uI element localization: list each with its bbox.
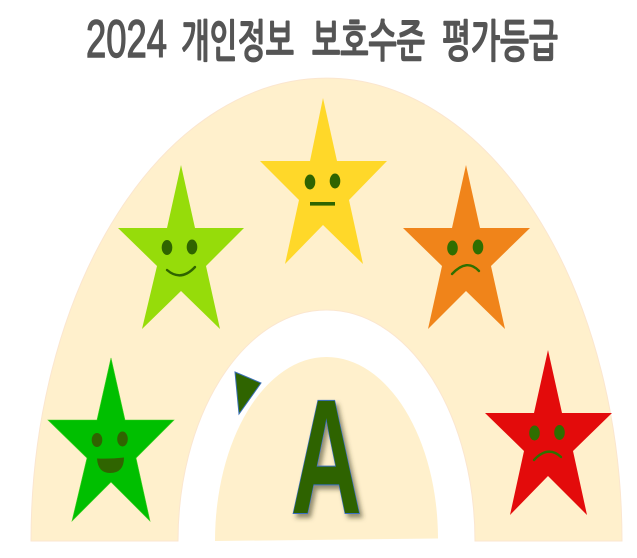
- inner arch dial: [215, 357, 438, 541]
- star: green, very satisfied: [48, 358, 174, 521]
- title: 개인정보: [181, 19, 294, 64]
- grade letter A: A: [291, 366, 362, 548]
- star: red, very dissatisfied: [485, 350, 612, 515]
- title: 보호수준: [312, 18, 425, 64]
- title: 평가등급: [442, 19, 558, 64]
- star: yellow, neutral: [260, 98, 387, 264]
- star: orange, dissatisfied: [403, 165, 530, 329]
- title: 2024: [86, 10, 167, 69]
- outer arch gauge band: [31, 78, 622, 541]
- gauge pointer arrow: [235, 372, 261, 414]
- star: lime, satisfied: [118, 165, 244, 329]
- title: [86, 10, 558, 69]
